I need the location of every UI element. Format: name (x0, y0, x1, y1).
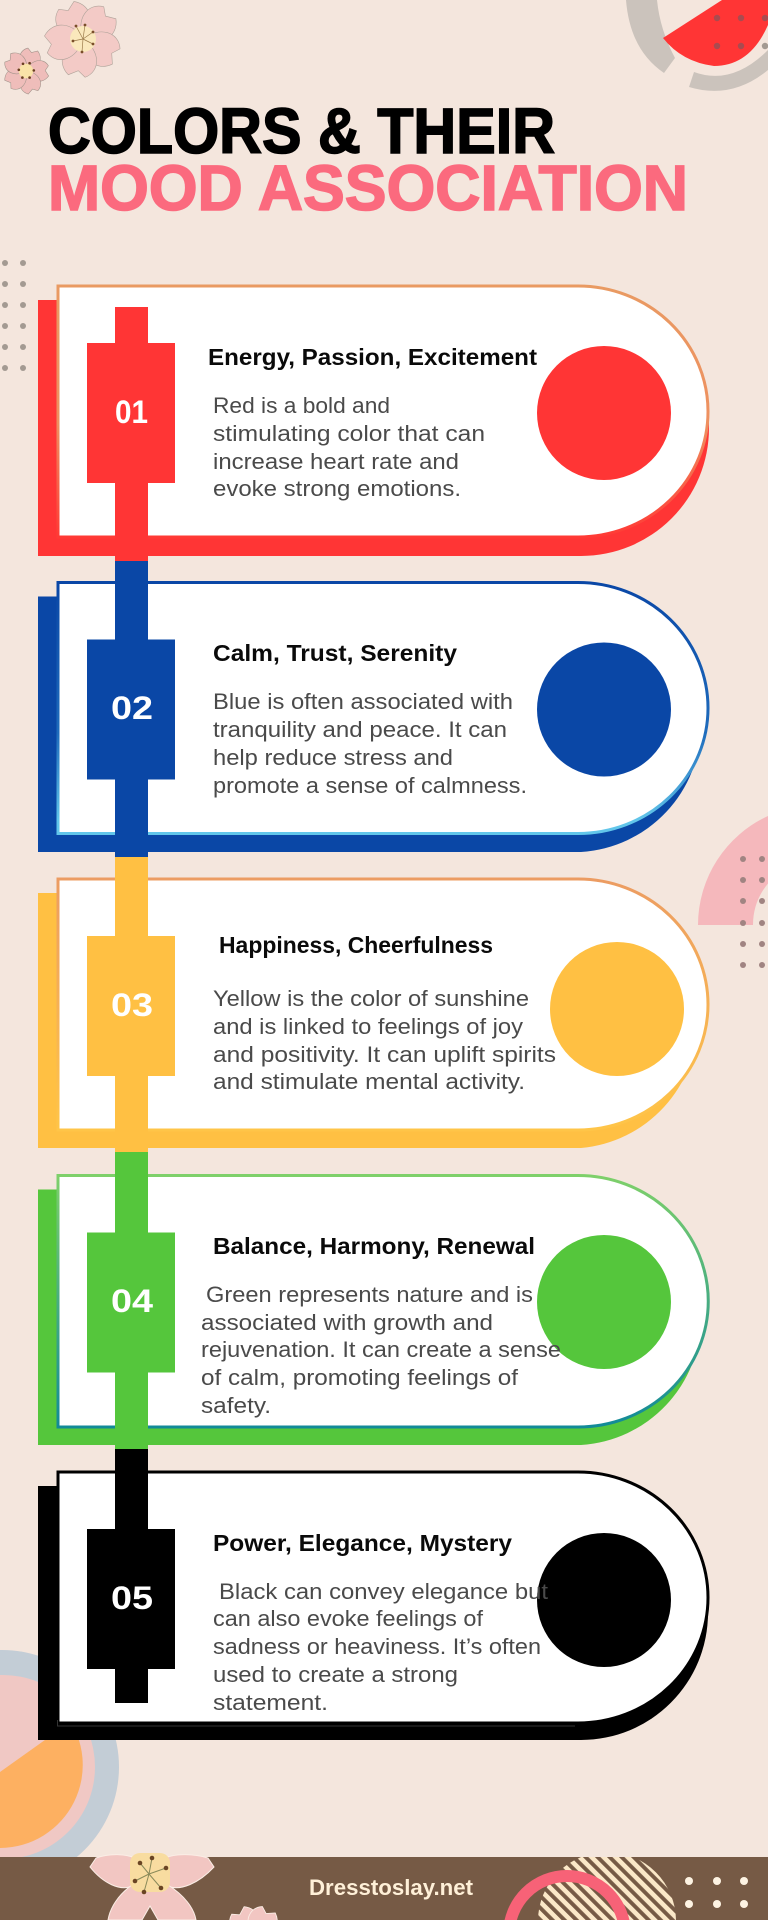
panel: card 4 green (38, 1152, 708, 1449)
card 5 shadow (38, 1486, 708, 1740)
title (48, 95, 688, 224)
title: MOOD ASSOCIATION (48, 152, 688, 224)
card 3 colour circle (550, 942, 684, 1076)
card 4 body text: Green represents nature and is (206, 1282, 533, 1307)
card 3 body text (213, 986, 556, 1094)
card 5 spine and number block: 05 (111, 1580, 153, 1616)
card 5 body text: can also evoke feelings of (213, 1606, 484, 1631)
panel: card 5 black (38, 1449, 708, 1740)
card 3 heading: Happiness, Cheerfulness (219, 932, 493, 958)
footer: small flower (225, 1902, 282, 1920)
card 2 heading: Calm, Trust, Serenity (213, 640, 457, 666)
card 1 body (58, 286, 708, 537)
footer: striped circle and pink ring (509, 1852, 676, 1920)
card 5 body (58, 1472, 708, 1723)
card 4 colour circle (537, 1235, 671, 1369)
card 5 body text: statement. (213, 1690, 328, 1715)
decoration: small top flower (1, 46, 49, 96)
panel: card 1 red (38, 286, 709, 561)
card 3 spine and number block (87, 857, 175, 1152)
card 5 colour circle (537, 1533, 671, 1667)
card 2 body text: Blue is often associated with (213, 689, 513, 714)
card 4 body text (201, 1282, 561, 1418)
card 1 body text (213, 393, 485, 501)
card 5 body text: Black can convey elegance but (219, 1579, 548, 1604)
decoration: left dot grid (2, 260, 26, 371)
card 2 shadow (38, 596, 701, 852)
card 1 colour circle (537, 346, 671, 480)
card 3 body text: and stimulate mental activity. (213, 1069, 525, 1094)
card 2 spine and number block: 02 (111, 690, 153, 726)
footer: website name: Dresstoslay.net (309, 1875, 474, 1900)
card 1 body text: evoke strong emotions. (213, 476, 461, 501)
card 4 shadow (38, 1190, 701, 1445)
card 3 spine and number block: 03 (111, 987, 153, 1023)
card 5 inner outline (58, 1720, 575, 1726)
card 3 body (58, 879, 708, 1130)
footer band (0, 1857, 768, 1920)
card 3 body text: and positivity. It can uplift spirits (213, 1042, 556, 1067)
card 3 body text: and is linked to feelings of joy (213, 1014, 523, 1039)
card 5 body text: sadness or heaviness. It’s often (213, 1634, 541, 1659)
card 4 body (58, 1176, 708, 1427)
title: COLORS & THEIR (48, 95, 555, 167)
card 1 spine and number block: 01 (115, 394, 148, 430)
decoration: bottom left concentric circles (0, 1650, 119, 1884)
card 3 body text: Yellow is the color of sunshine (213, 986, 529, 1011)
card 1 heading: Energy, Passion, Excitement (208, 344, 537, 370)
card 4 body text: rejuvenation. It can create a sense (201, 1337, 561, 1362)
footer: large flower (90, 1853, 214, 1920)
card 2 colour circle (537, 642, 671, 776)
card 3 shadow (38, 893, 698, 1148)
card 2 body (58, 582, 708, 834)
decoration: right pink arc with dots (698, 816, 768, 968)
card 4 body text: of calm, promoting feelings of (201, 1365, 519, 1390)
panel: card 2 blue (38, 561, 708, 857)
card 1 shadow (38, 300, 709, 556)
card 2 body text (213, 689, 527, 798)
card 4 heading: Balance, Harmony, Renewal (213, 1233, 535, 1259)
footer: dot grid (685, 1877, 748, 1908)
card 2 body text: promote a sense of calmness. (213, 773, 527, 798)
card 2 body text: help reduce stress and (213, 745, 453, 770)
card 5 spine and number block (87, 1449, 175, 1703)
card 4 body text: safety. (201, 1393, 271, 1418)
card 1 body text: increase heart rate and (213, 449, 459, 474)
card 1 body text: Red is a bold and (213, 393, 390, 418)
card 1 spine and number block (87, 307, 175, 561)
card 2 body text: tranquility and peace. It can (213, 717, 507, 742)
card 4 spine and number block: 04 (111, 1283, 153, 1319)
decoration: top right ring and red half circle (626, 0, 768, 91)
card 2 spine and number block (87, 561, 175, 857)
card 4 body text: associated with growth and (201, 1310, 493, 1335)
card 5 body text (213, 1579, 548, 1715)
card 5 heading: Power, Elegance, Mystery (213, 1530, 512, 1556)
card 4 spine and number block (87, 1152, 175, 1449)
panel: card 3 yellow (38, 857, 708, 1152)
card 5 body text: used to create a strong (213, 1662, 458, 1687)
card 1 body text: stimulating color that can (213, 421, 485, 446)
decoration: large top flower (44, 0, 125, 80)
